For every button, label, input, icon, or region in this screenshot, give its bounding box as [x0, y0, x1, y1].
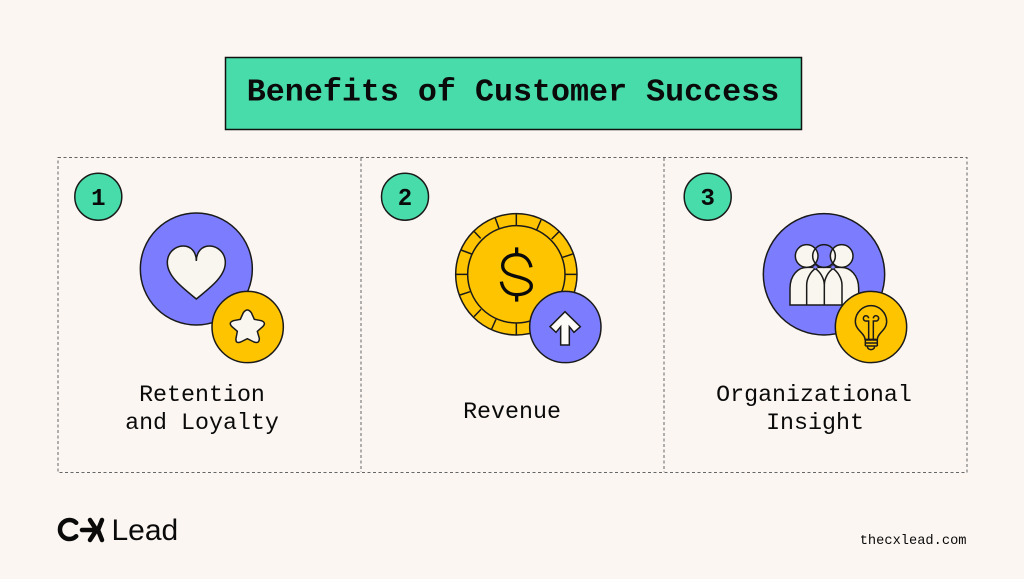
panel: revenue	[382, 173, 601, 425]
label: organizational insight: Insight	[766, 410, 864, 436]
label: organizational insight: Organizational	[716, 382, 912, 408]
badge 2: 2	[398, 186, 412, 213]
title: Benefits of Customer Success	[247, 74, 779, 110]
logo: CX Lead	[60, 514, 178, 547]
icon: people with light bulb	[763, 214, 907, 363]
title	[226, 58, 802, 130]
badge 1	[75, 173, 122, 220]
label: revenue: Revenue	[463, 399, 561, 425]
website url: thecxlead.com	[860, 534, 966, 549]
icon: heart with star	[140, 213, 283, 363]
label: retention and loyalty: and Loyalty	[125, 410, 279, 436]
badge 3: 3	[700, 186, 715, 213]
badge 2	[382, 173, 428, 220]
panels frame	[58, 158, 967, 472]
logo mark	[60, 520, 102, 540]
logo: CX Lead: Lead	[112, 514, 178, 547]
label: retention and loyalty: Retention	[139, 382, 265, 408]
icon: coin with up arrow	[456, 214, 601, 363]
badge 1: 1	[91, 186, 106, 213]
badge 3	[684, 173, 731, 220]
panel: organizational insight	[684, 173, 912, 436]
panel: retention and loyalty	[75, 173, 283, 436]
